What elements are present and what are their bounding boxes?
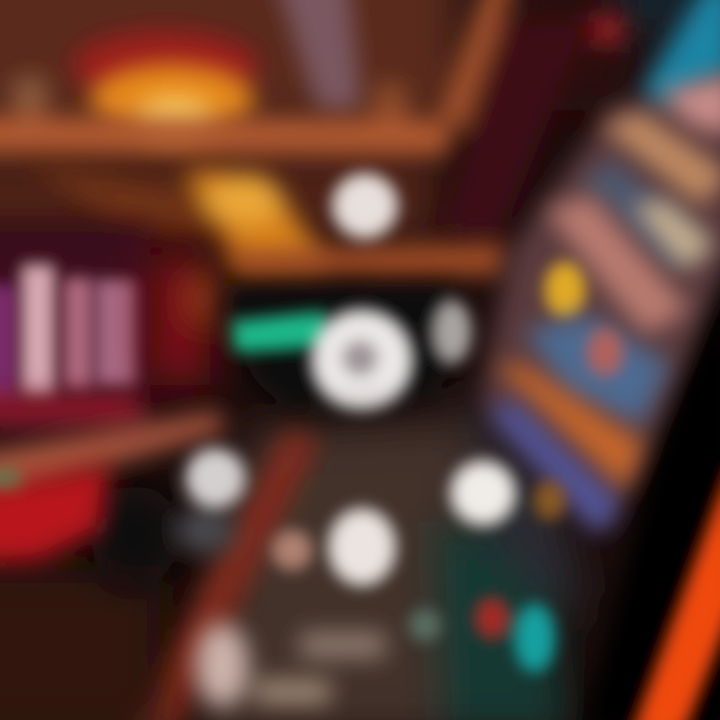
ceiling: mauve column bbox=[270, 0, 362, 110]
white spot: lower right bbox=[451, 461, 515, 525]
white spot: right of disc bbox=[432, 300, 472, 364]
dark red column bbox=[148, 255, 226, 385]
ceiling lamp: lower bbox=[30, 165, 330, 270]
ceiling: wood panels bbox=[0, 0, 720, 240]
white globe: top bbox=[333, 174, 397, 238]
white spot: lower centre bbox=[272, 509, 395, 585]
ceiling lamp: upper bbox=[73, 30, 257, 138]
green bar bbox=[232, 312, 330, 352]
slot machines: left bbox=[0, 225, 150, 435]
colourful shelves: right wall bbox=[480, 0, 720, 535]
central dark machine bbox=[225, 282, 455, 418]
bottom chips: red and teal bbox=[409, 598, 555, 672]
white spot: lower left bbox=[175, 448, 245, 554]
diagonal red carpet stripe bbox=[125, 430, 320, 720]
bottom stools bbox=[196, 623, 385, 707]
horizontal beam: lower bbox=[225, 242, 505, 278]
red table: lower left bbox=[0, 410, 225, 720]
diagonal beam: upper right bbox=[436, 0, 624, 240]
floor aisle bbox=[190, 380, 590, 720]
horizontal beam: upper bbox=[0, 75, 450, 156]
black diagonal band: right edge bbox=[580, 250, 720, 720]
orange diagonal stripe: lower right bbox=[632, 455, 720, 720]
white disc: central bbox=[312, 310, 412, 410]
